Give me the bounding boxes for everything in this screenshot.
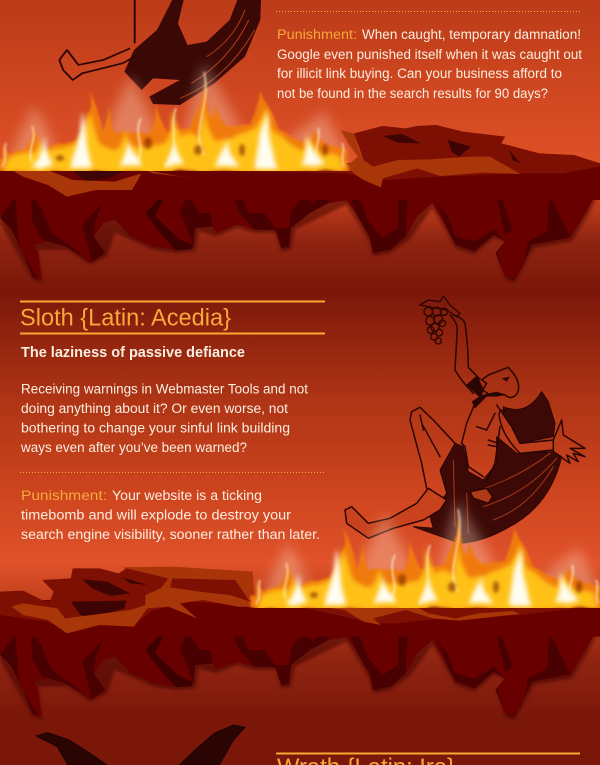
dotted divider: top section [276, 10, 582, 12]
punishment text: top section: not be found in the search results for 90 days? [277, 86, 548, 101]
grapes [420, 296, 460, 344]
cape fold highlights [453, 453, 557, 533]
punishment text: top section: Google even punished itself when it was caught out [277, 47, 582, 62]
raised knee [410, 407, 455, 488]
arm band [467, 377, 483, 397]
rock upper surface [0, 125, 600, 190]
devil leg outline [59, 0, 138, 80]
lower thigh [470, 488, 493, 503]
head [482, 367, 519, 397]
heading rule: wrath [276, 752, 580, 754]
rock ledge: top section [0, 125, 600, 283]
lava veins [11, 130, 520, 197]
body text: sloth: bothering to change your sinful link building [21, 420, 290, 436]
left wing [36, 733, 109, 765]
loincloth and cape [413, 392, 562, 543]
rock upper surface [0, 568, 600, 623]
punishment text: sloth: Your website is a ticking [112, 488, 262, 503]
subheading: sloth: The laziness of passive defiance [21, 345, 245, 361]
flames: sloth section [250, 499, 600, 609]
body text: sloth: Receiving warnings in Webmaster Tools and not [21, 382, 308, 396]
figure: sloth devil with grapes [345, 296, 585, 543]
devil cape and cloth [124, 0, 261, 105]
heading: sloth: Sloth {Latin: Acedia} [20, 304, 231, 332]
rock dark patches [71, 577, 147, 618]
stretched leg [345, 488, 447, 538]
punishment text: top section: Punishment: [277, 27, 357, 42]
body text: sloth: ways even after you’ve been warned? [20, 440, 247, 455]
heading rules: sloth [20, 300, 325, 334]
right wing [178, 725, 245, 765]
cape hatching [180, 10, 254, 98]
punishment text: sloth: Punishment: [21, 488, 107, 503]
punishment text: sloth: timebomb and will explode to destroy your [21, 508, 292, 522]
raised arm [450, 315, 480, 393]
rock back surface [122, 567, 254, 600]
punishment text: sloth: search engine visibility, sooner rather than later. [21, 527, 320, 542]
punishment text: top section: When caught, temporary damnation! [362, 27, 581, 42]
body text: sloth: doing anything about it? Or even worse, not [21, 401, 288, 416]
figure: top devil fragment [59, 0, 261, 105]
dotted divider: sloth [20, 472, 326, 474]
rock dark patches [73, 134, 520, 182]
rock ledge: sloth section [0, 567, 600, 720]
punishment text: top section: for illicit link buying. Can your business afford to [277, 66, 562, 81]
figure: wrath devil wings [36, 725, 245, 765]
flames: top section [0, 62, 352, 172]
extended hand [553, 420, 585, 463]
torso [462, 403, 553, 482]
lava veins [11, 587, 520, 633]
